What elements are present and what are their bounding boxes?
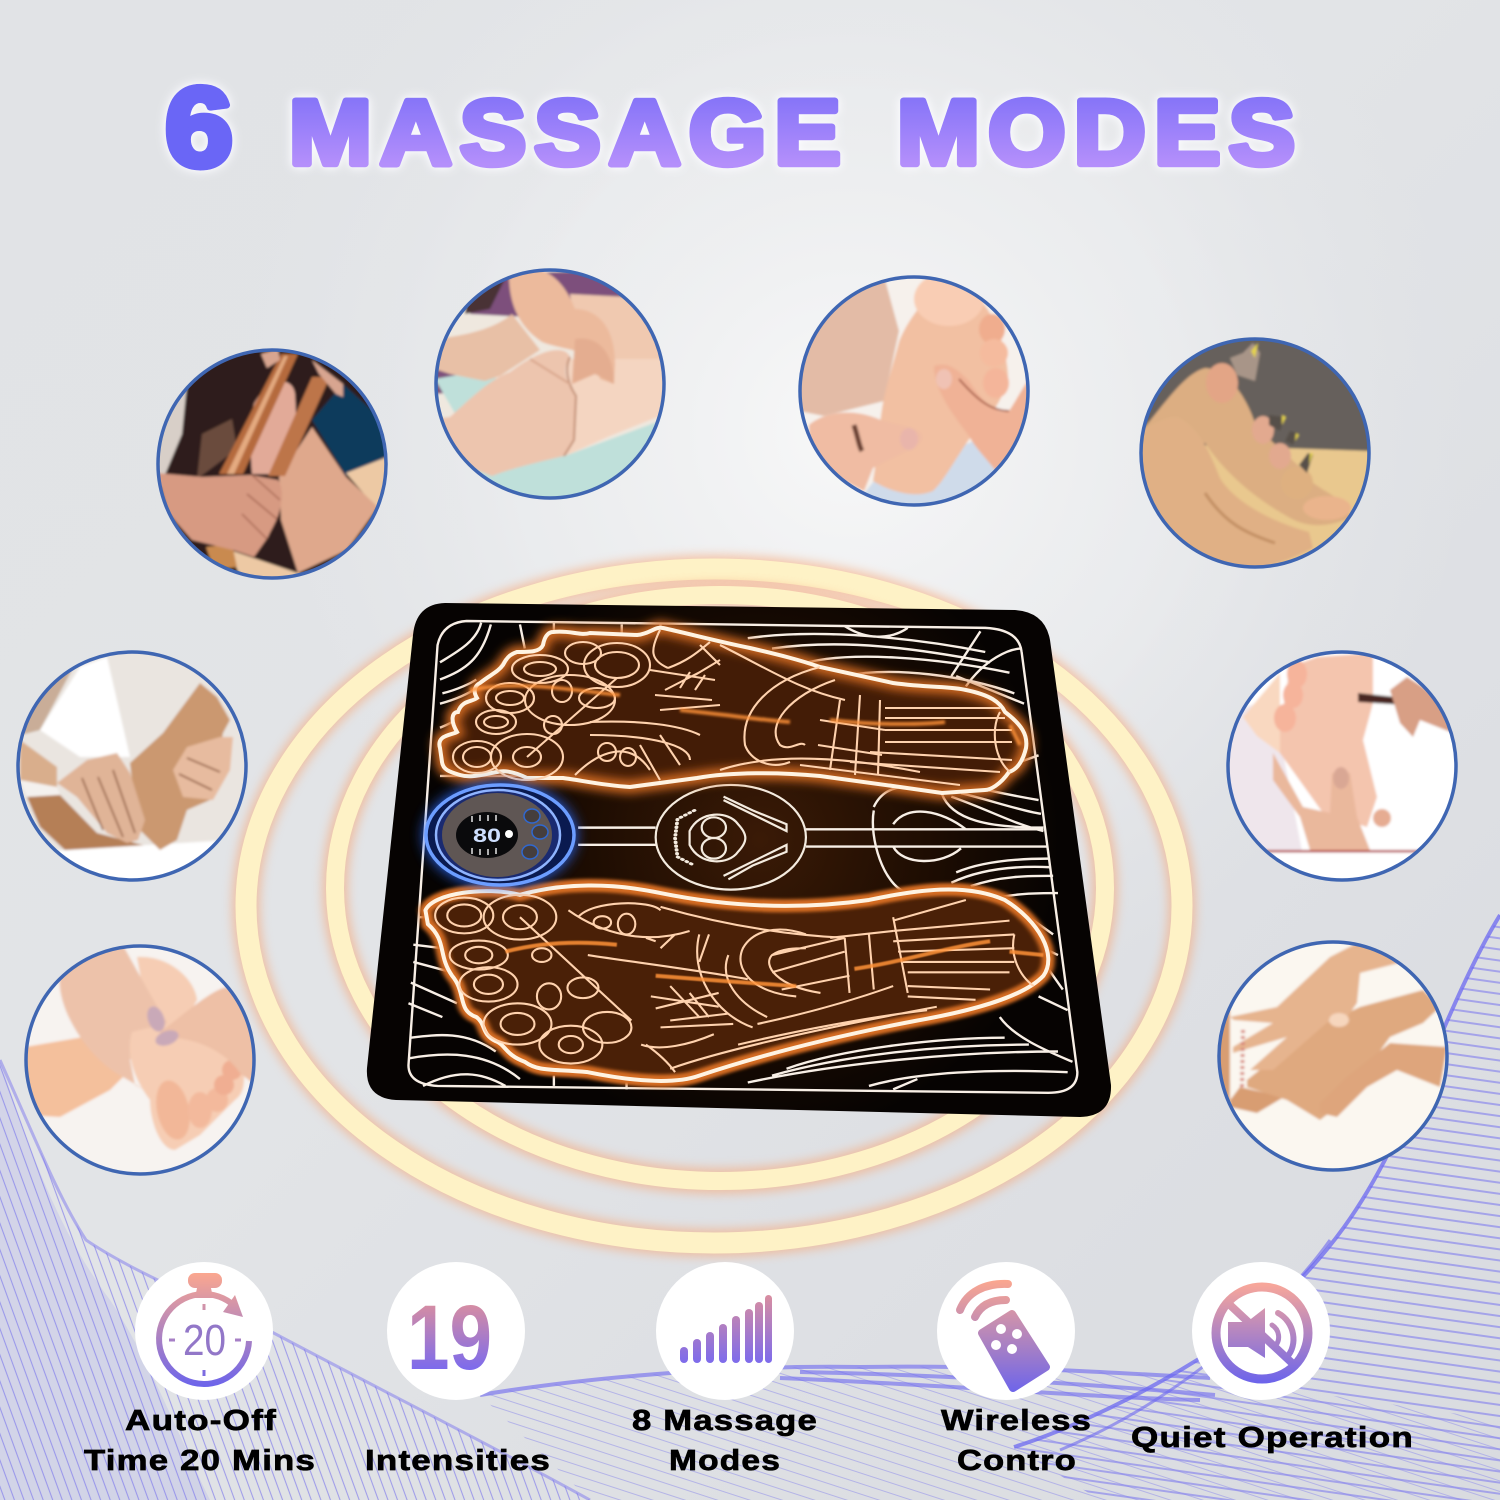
massage photo 7: sole held by two hands — [25, 940, 255, 1175]
icon: stopwatch 20: 20 — [183, 1316, 226, 1365]
label: Modes — [669, 1445, 781, 1477]
concentric glowing rings — [246, 569, 1182, 1243]
label: 8 Massage — [632, 1405, 818, 1437]
top foot — [439, 628, 1026, 793]
label: Time 20 Mins — [84, 1445, 316, 1477]
feature: auto-off timer — [84, 1262, 316, 1477]
label — [632, 1405, 818, 1477]
massage photo 2: thumb press — [435, 269, 665, 499]
label: Wireless — [941, 1405, 1092, 1437]
label: Auto-Off — [125, 1405, 277, 1437]
massage photo 4: cupping on feet — [1137, 338, 1370, 568]
icon: remote — [937, 1262, 1075, 1400]
title: MASSAGE — [289, 81, 849, 184]
label: Contro — [957, 1445, 1077, 1477]
title: 6 — [165, 65, 233, 190]
icon: number 19 — [387, 1262, 525, 1400]
massage photo 5: ankle massage — [17, 651, 247, 881]
mat body — [367, 603, 1111, 1117]
EMS foot massage mat — [367, 603, 1111, 1117]
decorative wave lines — [0, 915, 1500, 1500]
icon: rising bars — [656, 1262, 794, 1400]
icon: stopwatch 20 — [135, 1262, 273, 1400]
feature: wireless control — [937, 1262, 1092, 1477]
massage photo 1: copper sticks — [157, 349, 387, 579]
bottom foot — [425, 886, 1048, 1081]
label — [84, 1405, 316, 1477]
mat background contour lines — [408, 621, 1077, 1093]
title — [165, 65, 1303, 190]
feature: quiet operation — [1131, 1262, 1414, 1454]
feature: 19 intensities — [365, 1262, 551, 1477]
label — [941, 1405, 1092, 1477]
massage photo 8: hand on top of foot — [1218, 940, 1448, 1171]
icon: muted speaker — [1192, 1262, 1330, 1400]
massage photo 3: thumb pressing sole — [799, 272, 1029, 506]
title: MODES — [897, 81, 1303, 184]
control dial — [424, 783, 576, 887]
feature: 8 massage modes — [632, 1262, 818, 1477]
icon: number 19: 19 — [407, 1287, 492, 1389]
massage photo 6: reflexology stick — [1227, 651, 1457, 881]
label: Intensities — [365, 1445, 551, 1477]
control dial: 80 — [473, 826, 501, 847]
palm emblem — [656, 785, 806, 890]
label: Quiet Operation — [1131, 1422, 1414, 1454]
